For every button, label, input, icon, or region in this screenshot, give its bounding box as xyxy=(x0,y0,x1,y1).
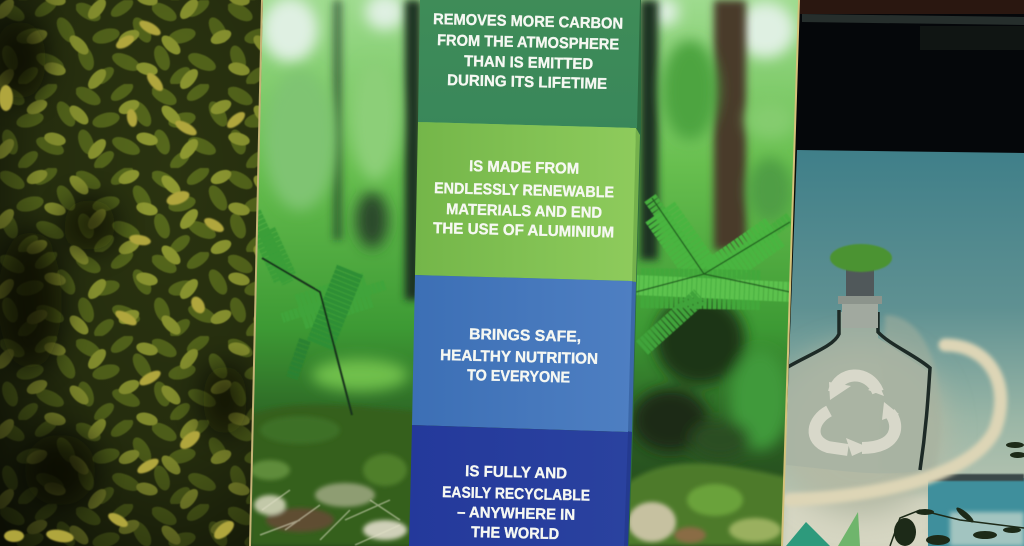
icon: green cap xyxy=(830,244,892,272)
panel: right dark background xyxy=(795,0,1024,160)
text: recyclable statement: EASILY RECYCLABLE xyxy=(442,484,590,505)
text: nutrition statement xyxy=(440,326,598,387)
icon: branch of leaves xyxy=(890,442,1024,546)
shape: shadow behind bottle xyxy=(884,314,936,382)
text: renewable statement: THE USE OF ALUMINIUM xyxy=(433,220,614,241)
icon: bottle xyxy=(786,244,932,473)
panel: navy block xyxy=(409,425,628,546)
panel: green block xyxy=(418,0,640,128)
panel: blue block xyxy=(412,275,632,432)
text: nutrition statement: BRINGS SAFE, xyxy=(469,326,581,346)
shape: bright sky patches xyxy=(262,0,795,62)
shape: light swirl ring xyxy=(790,345,1001,500)
shape: bright lower glow xyxy=(775,345,945,515)
icon: fern right xyxy=(636,198,792,348)
shape: mossy ground right xyxy=(625,463,790,546)
panel: light green block xyxy=(415,122,636,281)
shape: water xyxy=(928,478,1024,546)
text: renewable statement: ENDLESSLY RENEWABLE xyxy=(434,180,614,201)
text: nutrition statement: HEALTHY NUTRITION xyxy=(440,347,598,368)
shape: forest panel edge right xyxy=(782,0,799,546)
shape: mossy ground left xyxy=(250,404,420,546)
shape: green cartons at base xyxy=(786,522,830,546)
text: recyclable statement xyxy=(442,463,590,543)
text: renewable statement: IS MADE FROM xyxy=(469,158,579,178)
icon: fern left xyxy=(255,212,385,415)
text: renewable statement: MATERIALS AND END xyxy=(446,201,602,222)
shape: tower side face xyxy=(622,0,641,546)
shape: blurred foliage xyxy=(264,40,794,460)
text: recyclable statement: IS FULLY AND xyxy=(465,463,567,482)
text: renewable statement xyxy=(433,158,614,241)
panel: forest backdrop xyxy=(250,0,800,546)
text: carbon statement xyxy=(433,11,623,93)
shape: blurred tree trunks xyxy=(333,0,746,300)
text: nutrition statement: TO EVERYONE xyxy=(467,367,570,387)
text: recyclable statement: – ANYWHERE IN xyxy=(457,504,575,524)
panel: recycling wall poster xyxy=(775,150,1024,546)
panel: foliage wall xyxy=(0,0,266,546)
panel: carton tower xyxy=(409,0,641,546)
shape: poster base xyxy=(785,495,930,546)
text: carbon statement: FROM THE ATMOSPHERE xyxy=(437,32,619,53)
text: recyclable statement: THE WORLD xyxy=(471,524,559,543)
icon: recycling arrows xyxy=(815,375,899,456)
text: carbon statement: DURING ITS LIFETIME xyxy=(447,72,607,93)
shape: forest panel edge left xyxy=(250,0,262,546)
text: carbon statement: THAN IS EMITTED xyxy=(464,53,593,73)
text: carbon statement: REMOVES MORE CARBON xyxy=(433,11,623,33)
